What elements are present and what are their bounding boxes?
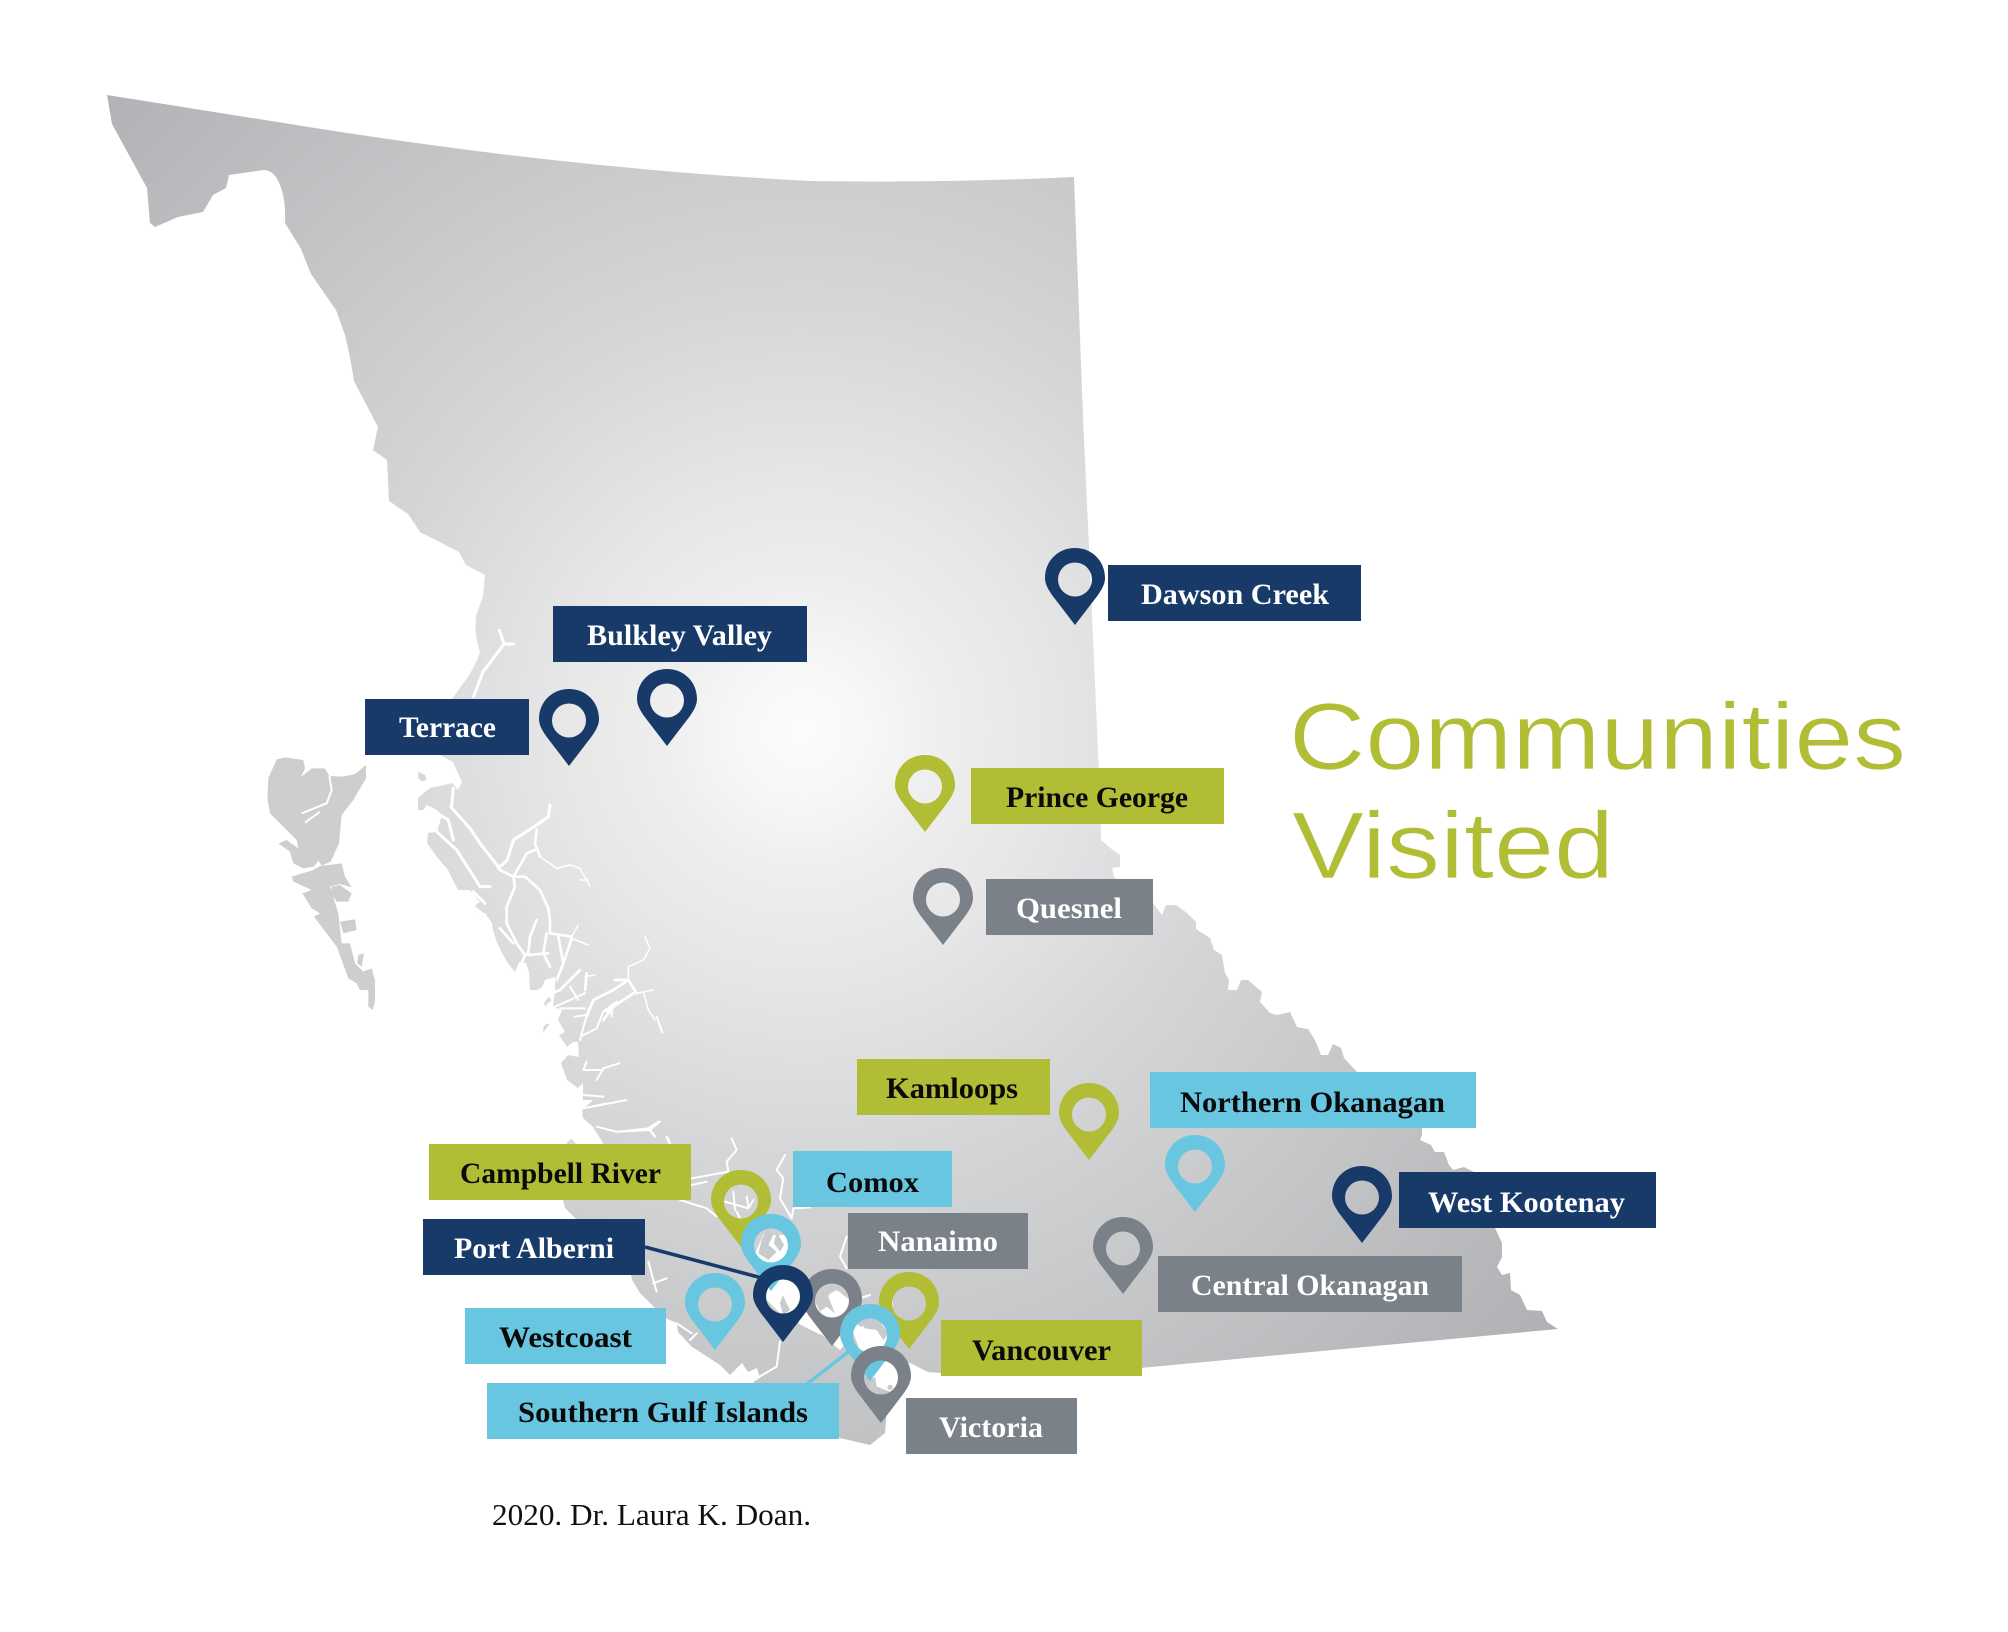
offshore islets central (543, 997, 576, 1144)
coastal inlets mid coast (500, 830, 637, 1020)
label: Kamloops: Kamloops (886, 1072, 1018, 1105)
pin: Southern Gulf Islands (840, 1304, 900, 1381)
mainland and Vancouver Island (107, 95, 1558, 1445)
pin: Bulkley Valley (637, 669, 697, 746)
label: Nanaimo (848, 1213, 1028, 1269)
label: Vancouver (941, 1320, 1142, 1376)
pin: Vancouver (879, 1272, 939, 1349)
title: Communities (1289, 684, 1906, 790)
label: Dawson Creek: Dawson Creek (1141, 578, 1329, 611)
label: Port Alberni (423, 1219, 645, 1275)
pin: Port Alberni (753, 1265, 813, 1342)
pin: Westcoast (685, 1273, 745, 1350)
label: Comox: Comox (826, 1166, 919, 1199)
connector line: Port Alberni (645, 1247, 762, 1278)
label: West Kootenay: West Kootenay (1428, 1186, 1625, 1219)
label: Kamloops (857, 1059, 1050, 1115)
label: Quesnel (986, 879, 1153, 935)
pin: Central Okanagan (1093, 1217, 1153, 1294)
label: Comox (793, 1151, 952, 1207)
pin: Nanaimo (802, 1269, 862, 1346)
label: Prince George: Prince George (1006, 781, 1188, 814)
label: Dawson Creek (1108, 565, 1361, 621)
pin: Prince George (895, 755, 955, 832)
label: Victoria (906, 1398, 1077, 1454)
title: Visited (1292, 793, 1614, 899)
label: Bulkley Valley: Bulkley Valley (587, 619, 772, 652)
label: Victoria: Victoria (939, 1411, 1043, 1444)
label: Bulkley Valley (553, 606, 807, 662)
strait of Georgia (755, 1230, 910, 1395)
label: Northern Okanagan: Northern Okanagan (1180, 1086, 1445, 1119)
label: Southern Gulf Islands (487, 1383, 839, 1439)
pin: Northern Okanagan (1165, 1135, 1225, 1212)
pin: Campbell River (711, 1170, 771, 1247)
coastal inlets north (437, 788, 550, 913)
inlet near Terrace (473, 629, 515, 698)
pin: Dawson Creek (1045, 548, 1105, 625)
label: Prince George (971, 768, 1224, 824)
label: Port Alberni: Port Alberni (454, 1232, 614, 1265)
pin: Kamloops (1059, 1083, 1119, 1160)
label: Terrace (365, 699, 529, 755)
label: Westcoast (465, 1308, 666, 1364)
label: Vancouver: Vancouver (972, 1334, 1111, 1367)
label: Nanaimo: Nanaimo (878, 1225, 998, 1258)
map of British Columbia (107, 95, 1558, 1445)
Haida Gwaii and offshore islets (267, 757, 427, 1010)
label: Central Okanagan (1158, 1256, 1462, 1312)
pin: West Kootenay (1332, 1166, 1392, 1243)
label: Campbell River: Campbell River (460, 1157, 661, 1190)
title (1289, 684, 1906, 899)
pin: Quesnel (913, 868, 973, 945)
credit line: 2020. Dr. Laura K. Doan. (492, 1497, 811, 1532)
label: Terrace: Terrace (399, 711, 496, 744)
coastal inlets central (555, 987, 670, 1145)
connector line: Southern Gulf Islands (807, 1352, 848, 1384)
pin: Victoria (851, 1346, 911, 1423)
label: Central Okanagan: Central Okanagan (1191, 1269, 1429, 1302)
label: Northern Okanagan (1150, 1072, 1476, 1128)
coastal inlets south (620, 1122, 892, 1378)
coastal inlet tapers mid coast (540, 857, 655, 1020)
pin: Comox (741, 1214, 801, 1291)
label: Southern Gulf Islands: Southern Gulf Islands (518, 1396, 808, 1429)
label: West Kootenay (1399, 1172, 1656, 1228)
pin: Terrace (539, 689, 599, 766)
label: Westcoast: Westcoast (499, 1321, 632, 1354)
label: Quesnel: Quesnel (1016, 892, 1122, 925)
label: Campbell River (429, 1144, 691, 1200)
